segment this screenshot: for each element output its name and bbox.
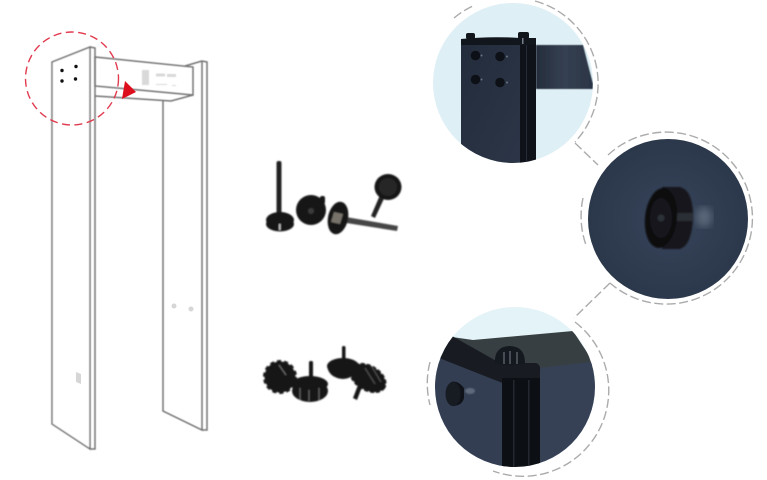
ring around circle 3 xyxy=(493,322,609,476)
light background xyxy=(453,307,587,352)
dark panel xyxy=(588,139,748,299)
red arrow xyxy=(122,81,136,99)
left post xyxy=(52,47,95,449)
black rail xyxy=(502,378,540,470)
bolt lying down xyxy=(325,200,398,236)
dashed connector ring xyxy=(427,1,752,476)
four knobs xyxy=(471,51,505,87)
connector 1 to 2 xyxy=(575,143,598,165)
top surface xyxy=(452,331,600,372)
right post screw marks xyxy=(172,304,194,312)
knob B xyxy=(292,361,328,402)
line drawing: metal detector gate xyxy=(52,47,207,449)
top knob xyxy=(495,346,525,366)
right panel xyxy=(538,362,595,464)
red dashed highlight circle xyxy=(26,32,118,125)
crossbeam xyxy=(536,45,593,89)
ring around circle 1 xyxy=(454,5,475,18)
left panel xyxy=(435,356,505,466)
post panel xyxy=(461,40,521,170)
connector 2 to 3 xyxy=(574,283,610,318)
post rail xyxy=(520,40,536,170)
detail circle 2: knob close-up xyxy=(588,139,748,299)
four mounting holes xyxy=(60,65,78,83)
bolt leaning xyxy=(371,174,402,218)
knob D xyxy=(346,358,390,400)
disc facing front xyxy=(296,195,326,225)
side knob xyxy=(446,382,475,406)
ring around circle 2 xyxy=(608,132,752,304)
crossbeam xyxy=(95,57,202,101)
bolt upright xyxy=(266,161,294,232)
right post xyxy=(163,61,207,430)
short knobs group xyxy=(264,346,390,402)
knob A xyxy=(264,362,296,392)
long bolts group xyxy=(266,161,402,236)
detail circle 3: corner close-up xyxy=(435,307,595,467)
knob C xyxy=(327,346,359,379)
detail circle 1: top of post xyxy=(433,3,593,163)
knob highlights xyxy=(480,54,508,84)
shine on panel xyxy=(696,207,712,227)
light background xyxy=(433,3,593,160)
crossbeam label marks xyxy=(142,70,176,86)
top cap and knobs xyxy=(461,32,536,45)
left post panel mark xyxy=(76,372,81,384)
knob xyxy=(642,186,693,250)
cap band xyxy=(434,336,540,384)
